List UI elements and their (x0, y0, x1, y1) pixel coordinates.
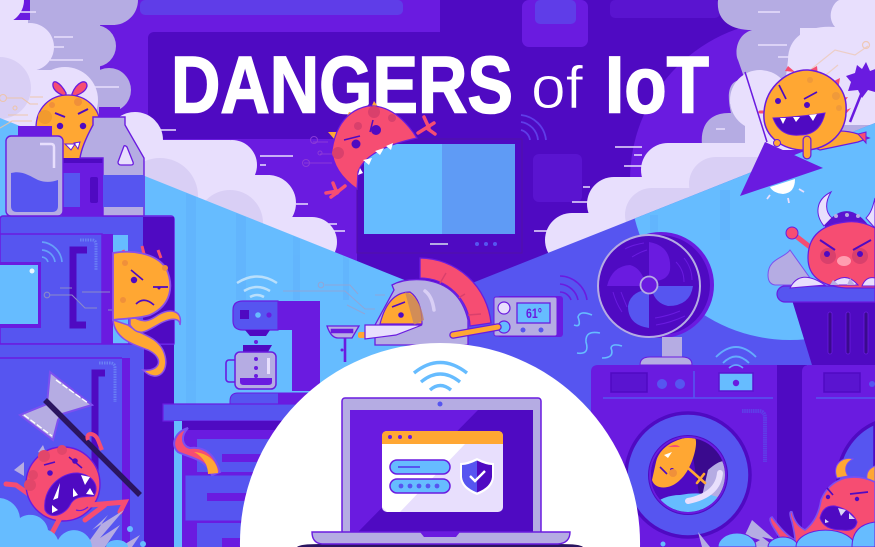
white circle (240, 343, 640, 547)
background: dark room (140, 0, 738, 291)
circuit traces: octopus (44, 288, 112, 310)
monster tentacle: red on drawer (174, 428, 220, 475)
wall: blue left side (0, 118, 442, 547)
icon: wifi above washer (716, 347, 756, 368)
jar (6, 126, 63, 216)
circuit traces: knight (283, 282, 385, 314)
monster: orange octopus peeking (113, 246, 180, 376)
lower cabinet (0, 344, 174, 547)
password field (390, 479, 450, 493)
monster: orange top left (36, 82, 100, 160)
laundry basket (777, 286, 875, 365)
shield icon (460, 458, 494, 495)
icon: wifi above coffee maker (237, 276, 277, 297)
wall stripes (186, 190, 730, 420)
wall: blue circle right (634, 123, 875, 340)
title: of (531, 54, 583, 121)
thermostat: 61° (526, 305, 542, 321)
light bulb under sail (767, 179, 804, 203)
clouds: right side (534, 0, 875, 267)
sail triangle (740, 142, 823, 196)
icon: wifi by thermostat (560, 276, 587, 300)
heat squiggles (574, 313, 622, 358)
circuit traces: top left (0, 94, 43, 128)
monster in washer drum (651, 438, 725, 512)
blue clouds and spikes: bottom right (660, 520, 875, 547)
washing machine left (591, 365, 807, 547)
monster: knight helmet with knife (327, 258, 491, 362)
TV (357, 139, 522, 253)
icon: wifi above laptop (414, 362, 467, 390)
laptop (297, 398, 583, 547)
monster: red bottom right (770, 458, 875, 547)
blue clouds: bottom left (0, 498, 146, 547)
fan (598, 232, 714, 365)
gauge needle (453, 327, 498, 335)
upper cabinet (0, 216, 174, 346)
thermostat (494, 296, 563, 337)
table and drawers (163, 404, 313, 547)
monster: orange flying (745, 62, 875, 155)
icon: wifi by TV (521, 115, 546, 140)
box on shelf (62, 158, 103, 216)
title: IoT (605, 40, 709, 130)
monster: red with axe (6, 372, 140, 535)
title: DANGERS (171, 40, 513, 130)
coffee maker (226, 301, 320, 404)
monster: red biting TV (302, 101, 435, 197)
username field (390, 460, 450, 474)
bottle (80, 107, 144, 216)
login window (382, 431, 503, 512)
clouds: diagonal left (107, 112, 345, 267)
washing machine right (802, 365, 875, 547)
clouds: top left (0, 0, 138, 133)
wall: indigo right side (442, 123, 875, 547)
gauge needle fill (453, 327, 498, 335)
monster: viking red in basket (768, 192, 875, 288)
